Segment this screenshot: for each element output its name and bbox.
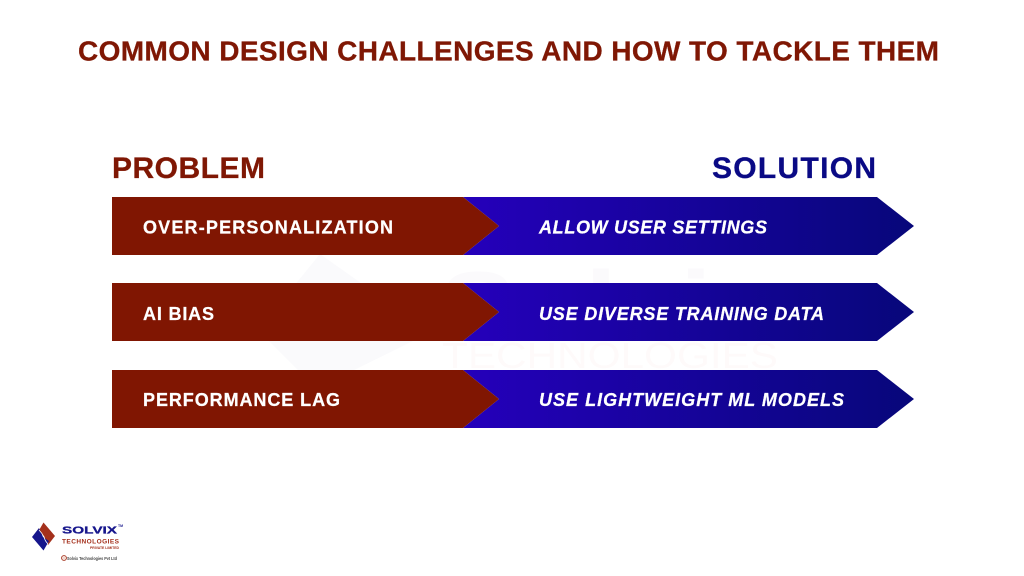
solution arrow 2 — [463, 283, 914, 341]
logo — [32, 522, 123, 561]
logo subtitle: TECHNOLOGIES — [62, 538, 120, 546]
background watermark — [258, 251, 778, 376]
problem arrow 1 — [112, 197, 499, 255]
problem text 3: PERFORMANCE LAG — [143, 390, 340, 410]
logo wordmark: SOLVIX — [62, 524, 117, 536]
problem arrow 3 — [112, 370, 499, 428]
logo trademark: TM — [118, 524, 123, 528]
solution arrow 3 — [463, 370, 914, 428]
solution text 2: USE DIVERSE TRAINING DATA — [539, 304, 824, 324]
title: COMMON DESIGN CHALLENGES AND HOW TO TACKLE THEM — [78, 36, 939, 66]
logo company name: Solvix Technologies Pvt Ltd — [67, 556, 117, 561]
background watermark: TECHNOLOGIES — [442, 335, 778, 376]
background watermark: Solvix — [440, 251, 775, 361]
row 2: AI bias — [112, 283, 914, 341]
icon: logo mark — [32, 522, 55, 550]
heading: solution: SOLUTION — [712, 152, 876, 185]
row 3: performance lag — [112, 370, 914, 428]
solution arrow 1 — [463, 197, 914, 255]
problem text 2: AI BIAS — [143, 304, 214, 324]
logo tagline: PRIVATE LIMITED — [90, 546, 119, 550]
solution text 3: USE LIGHTWEIGHT ML MODELS — [539, 390, 844, 410]
heading: problem: PROBLEM — [112, 152, 265, 185]
problem arrow 2 — [112, 283, 499, 341]
problem text 1: OVER-PERSONALIZATION — [143, 218, 393, 238]
row 1: over-personalization — [112, 197, 914, 255]
solution text 1: ALLOW USER SETTINGS — [538, 218, 767, 238]
